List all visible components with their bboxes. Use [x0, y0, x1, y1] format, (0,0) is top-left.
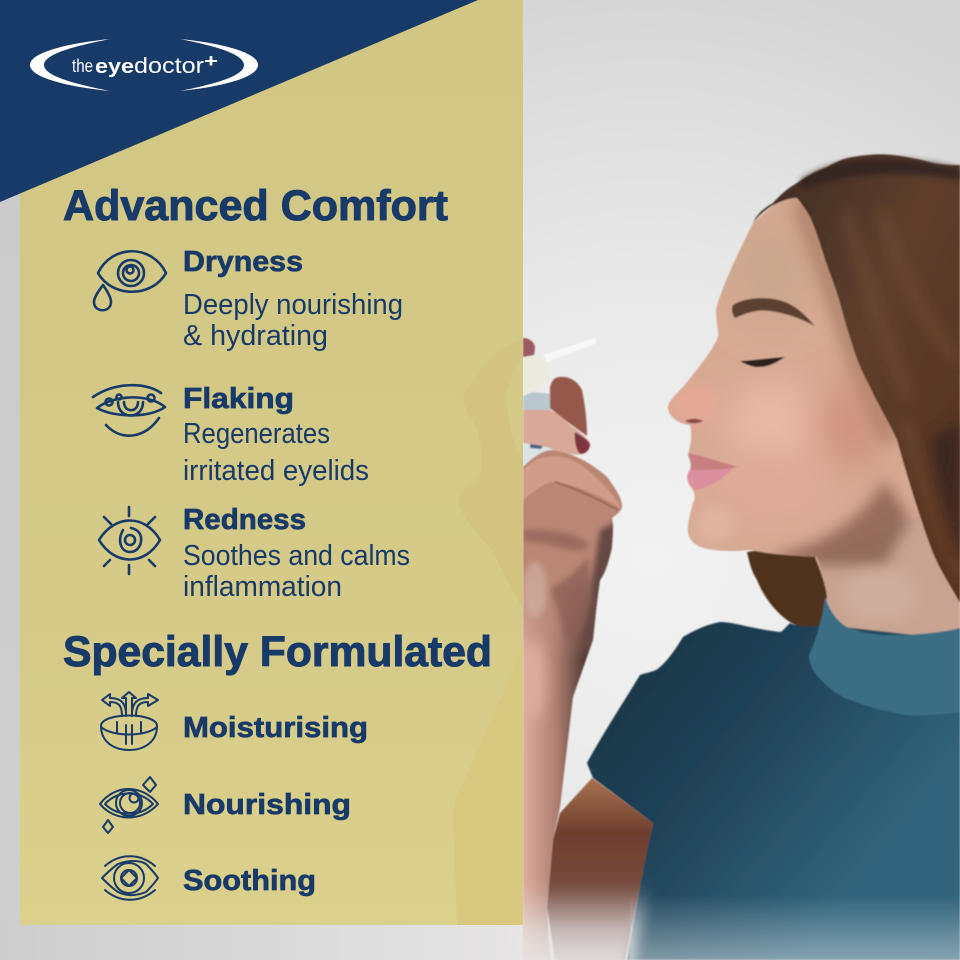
ghost of hand through panel [458, 340, 523, 610]
icon: nourishing eye with sparkles [100, 777, 158, 833]
label: Moisturising: Moisturising [183, 712, 368, 744]
forearm highlight [525, 640, 545, 720]
label: Dryness [183, 246, 303, 278]
block: Flaking: irritated eyelids [183, 455, 369, 487]
description: Deeply nourishing [183, 289, 403, 321]
neck [800, 480, 960, 640]
middle finger behind bottle [550, 377, 587, 436]
description: Regenerates [183, 418, 330, 450]
mouth region [700, 455, 840, 525]
upper lip [688, 453, 738, 470]
logo swoosh right [180, 39, 258, 91]
logo [30, 39, 258, 91]
face and neck shading [667, 197, 919, 614]
photo: woman in profile [510, 154, 960, 960]
block: Redness: inflammation [183, 571, 342, 603]
heading: Specially Formulated: Specially Formulated [63, 628, 492, 676]
hair [753, 154, 960, 603]
label: Flaking [183, 383, 294, 415]
logo swoosh left [30, 39, 110, 91]
logo: eye [95, 56, 134, 78]
shirt [587, 622, 960, 960]
blush [818, 380, 882, 470]
finger crease [555, 482, 618, 510]
palm highlight [523, 562, 547, 618]
hand right shadow [579, 520, 614, 639]
neck highlight [852, 568, 908, 614]
bottle body [523, 440, 565, 465]
icon: moisturising lens with arrows [101, 692, 158, 750]
label: Nourishing: Nourishing [183, 789, 351, 821]
block: Flaking [183, 383, 369, 487]
cheek [724, 380, 818, 454]
finger highlight [523, 456, 620, 508]
nose [673, 386, 716, 421]
forearm bottom fade [510, 885, 650, 960]
lower lip [688, 468, 733, 490]
index fingernail [575, 432, 590, 454]
panel: translucent yellow column [20, 0, 523, 925]
nostril [685, 419, 703, 423]
index finger [523, 410, 590, 454]
description: Soothes and calms [183, 540, 410, 572]
bottle band [530, 444, 543, 449]
hair behind the neck [747, 545, 830, 629]
jaw shadow [770, 480, 910, 565]
block: Dryness [183, 246, 403, 352]
logo wordmark: the [72, 56, 93, 76]
banner: navy corner triangle [0, 0, 478, 202]
forehead tone [738, 233, 804, 302]
shirt bottom fade [630, 895, 960, 960]
upper arm [547, 778, 653, 960]
label: Soothing: Soothing [183, 865, 316, 897]
thumb nail [523, 338, 535, 357]
hairline shade [800, 200, 890, 440]
bottle collar [523, 392, 566, 410]
ghost of arm through panel [453, 645, 523, 925]
label: Redness [183, 504, 306, 536]
logo: doctor [134, 53, 204, 78]
block: Dryness: & hydrating [183, 320, 328, 352]
dark hair crown [800, 159, 960, 188]
forearm and hand [523, 338, 628, 960]
logo: + [204, 51, 218, 71]
hand back and forearm [523, 450, 622, 960]
dark hair low [930, 420, 960, 560]
wrist wrinkles [550, 555, 592, 640]
block: Redness [183, 504, 410, 603]
icon: red eye with rays [99, 507, 160, 574]
chin [699, 512, 730, 538]
left margin strip [0, 190, 40, 960]
closed eye lashes [740, 357, 785, 367]
hand base tone [523, 445, 628, 660]
spray cap [523, 356, 550, 394]
eyebrow [732, 298, 815, 326]
knuckle shadow [523, 530, 590, 551]
icon: flaking eyelid [93, 385, 165, 436]
turtleneck collar [809, 597, 960, 715]
icon: soothing eye [102, 856, 158, 900]
icon: dry eye with tear [94, 251, 166, 310]
nozzle [543, 338, 597, 362]
bottom margin strip [0, 920, 560, 960]
hair strands [845, 210, 960, 580]
heading: Advanced Comfort: Advanced Comfort [63, 182, 448, 230]
